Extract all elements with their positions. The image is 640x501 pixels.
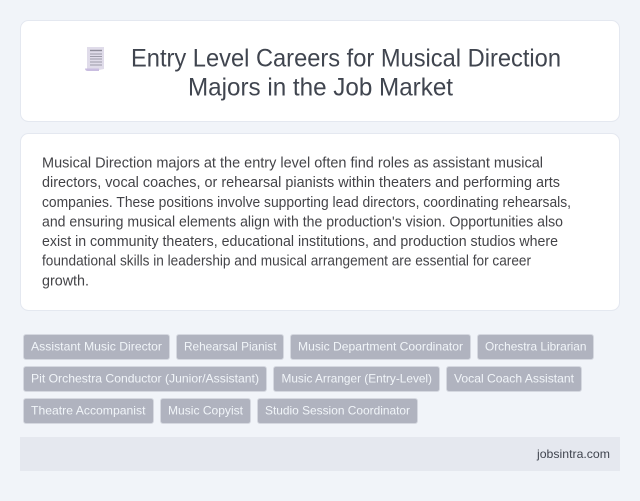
footer source text: jobsintra.com — [536, 447, 610, 461]
title text: Entry Level Careers for Musical Direction — [131, 44, 561, 72]
description text: growth. — [42, 274, 89, 290]
tag: Music Arranger: Music Arranger (Entry-Level) — [282, 372, 432, 386]
description text: exist in community theaters, educational institutions, and production studios where — [42, 234, 558, 250]
tag: Orchestra Librarian: Orchestra Librarian — [485, 340, 586, 354]
tag: Music Department Coordinator — [290, 334, 470, 360]
tag: Pit Orchestra Conductor: Pit Orchestra Conductor (Junior/Assistant) — [31, 372, 259, 386]
tag: Music Department Coordinator: Music Department Coordinator — [298, 340, 463, 354]
panel: description — [20, 134, 620, 310]
description text: Musical Direction majors at the entry level often find roles as assistant musical — [42, 156, 543, 172]
description text: companies. These positions involve supporting lead directors, coordinating rehearsals, — [42, 195, 571, 211]
tag: Rehearsal Pianist: Rehearsal Pianist — [184, 340, 277, 354]
tag: Pit Orchestra Conductor — [24, 366, 266, 392]
tag: Rehearsal Pianist — [176, 334, 284, 360]
title text: Majors in the Job Market — [188, 74, 453, 102]
job tags — [24, 334, 594, 424]
description text: foundational skills in leadership and musical arrangement are essential for career — [42, 254, 531, 270]
tag: Theatre Accompanist: Theatre Accompanist — [31, 404, 146, 418]
tag: Music Copyist — [160, 398, 250, 424]
tag: Music Arranger — [274, 366, 440, 392]
title text — [131, 44, 561, 102]
icon: sheet music scroll — [85, 47, 104, 71]
tag: Vocal Coach Assistant — [446, 366, 582, 392]
description text: and ensuring musical elements align with the production's vision. Opportunities also — [42, 214, 563, 230]
tag: Music Copyist: Music Copyist — [168, 404, 244, 418]
tag: Studio Session Coordinator: Studio Session Coordinator — [265, 404, 410, 418]
tag: Orchestra Librarian — [478, 334, 594, 360]
tag: Studio Session Coordinator — [258, 398, 418, 424]
tag: Vocal Coach Assistant: Vocal Coach Assistant — [454, 372, 575, 386]
tag: Theatre Accompanist — [24, 398, 154, 424]
footer bar — [20, 437, 620, 471]
description text — [42, 156, 571, 290]
tag: Assistant Music Director — [24, 334, 170, 360]
tag: Assistant Music Director: Assistant Music Director — [31, 340, 162, 354]
description text: directors, vocal coaches, or rehearsal pianists within theaters and performing arts — [42, 175, 560, 191]
panel: title header — [20, 20, 620, 122]
